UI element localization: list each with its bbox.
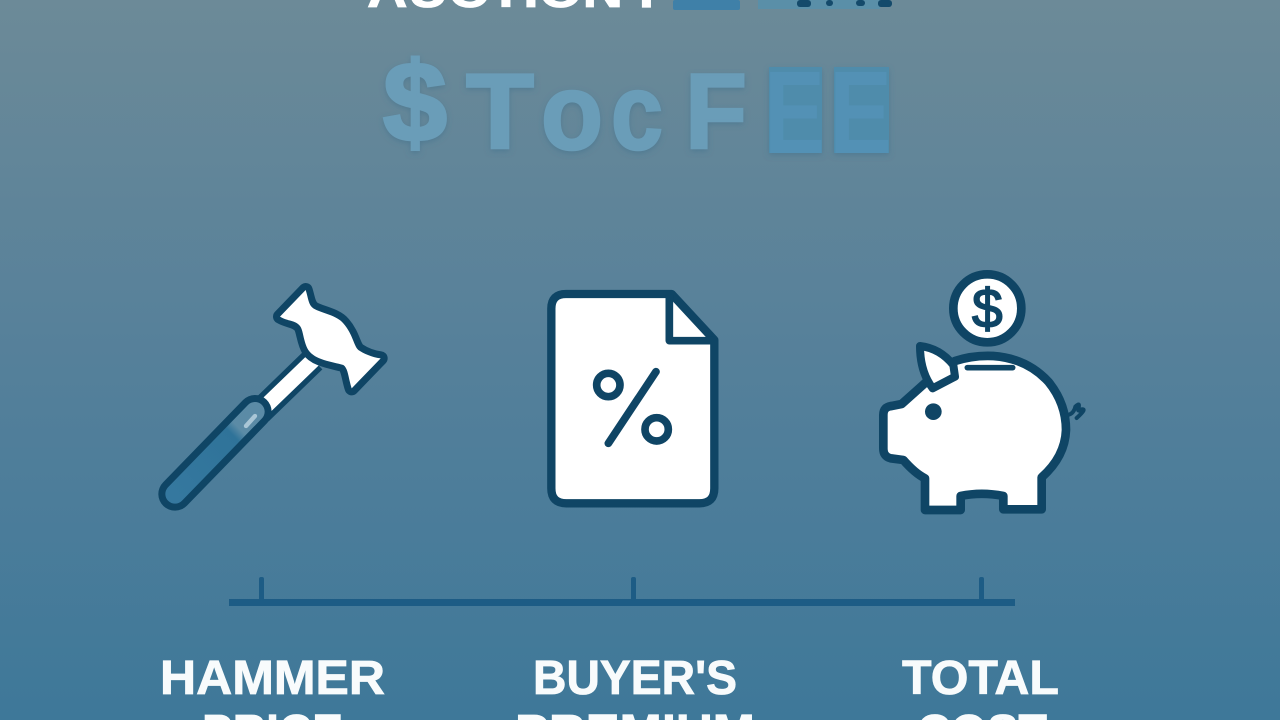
timeline [229, 577, 1015, 606]
faded subtitle text: E [764, 47, 825, 179]
faded subtitle text: F [685, 51, 747, 171]
coin [953, 274, 1021, 342]
pig ear [920, 346, 955, 388]
label: buyer's premium [515, 652, 755, 720]
icon: document with percent [551, 294, 714, 503]
document page [551, 294, 714, 503]
title: clipped heading [367, 0, 892, 18]
percent symbol [597, 372, 668, 443]
hammer grip [175, 412, 255, 494]
icon: piggy bank with coin [883, 274, 1084, 510]
faded subtitle text: T [466, 51, 534, 171]
label: total cost: TOTAL [902, 652, 1059, 705]
coin slot [967, 359, 1013, 376]
icon: auction hammer [175, 290, 381, 494]
faded subtitle text: c [611, 51, 663, 172]
pig eye [925, 403, 942, 420]
coin: $ [972, 277, 1003, 339]
faded subtitle text: $ [383, 39, 447, 165]
document fold [669, 295, 714, 341]
label: buyer's premium: BUYER'S [533, 652, 737, 705]
hammer head [280, 290, 381, 388]
faded subtitle text: E [829, 47, 892, 179]
pig tail [1066, 404, 1084, 418]
hammer handle [260, 360, 313, 412]
faded subtitle text [383, 39, 892, 179]
faded subtitle text: o [541, 51, 603, 172]
label: hammer price: HAMMER [160, 652, 385, 705]
pig body [883, 356, 1066, 510]
